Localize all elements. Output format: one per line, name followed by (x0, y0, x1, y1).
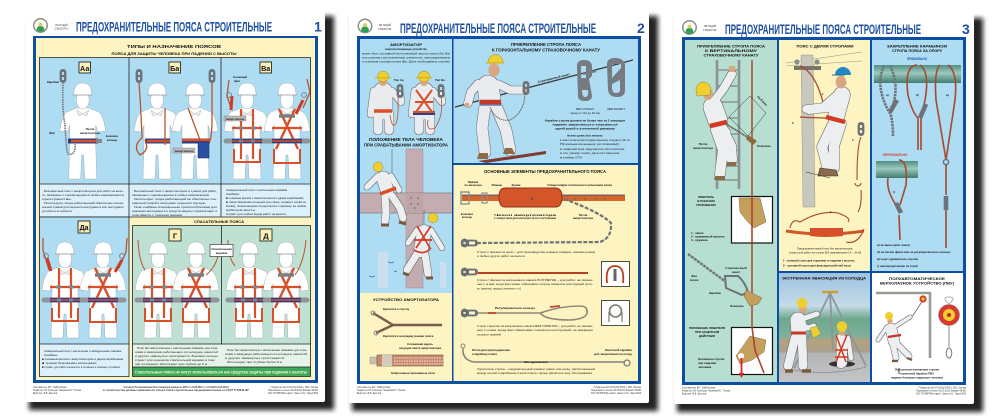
panel: autonomous device: При резком натяжении стропа (895, 368, 939, 372)
panel: rescue belts: Спасательные пояса не могут использоваться как средства защиты при падении с высоты (135, 370, 307, 374)
rope without braid sling (461, 300, 630, 336)
text block Va: ■ съемным фалом с амортизатором и двумя карабинами; (226, 196, 304, 200)
panel: Da: Универсальный пояс с наплечными и набедренными лямками. (44, 349, 122, 353)
belt type Aa (47, 62, 118, 179)
panel: absorber device: Капроновые прошивные нити (391, 371, 435, 375)
slogan (703, 25, 718, 32)
slogan: С ВЫСОТЫ ! (378, 28, 393, 31)
logo (682, 20, 697, 35)
rope in braid sling: Строп с фалом из капронового каната В ОПЛЕТКЕ – для работ, не связан- (477, 278, 593, 282)
panel: rescue belts: Пояс без амортизатора с наплечными лямками для стра- (227, 348, 307, 352)
panel: autonomous device (872, 273, 963, 382)
lanyard catcher detail (688, 254, 762, 308)
panel: attachment to horizontal rope: ● клеймо ОТК (560, 156, 582, 160)
rope in braid sling: ных с огнем, когда фал может обматывать острые элементы конструкций (угол- (477, 282, 593, 286)
panel: absorber device: Сложенная вдоль (407, 342, 433, 346)
belt: Ремень (492, 183, 503, 187)
panel: rescue belts: служит для переноски спасательной веревки в пояс (135, 358, 216, 362)
lineman (792, 66, 851, 178)
belt type Aa: Петля (86, 127, 95, 131)
rope in braid sling: ки, швеллер, твердого сечения и т.п.) (477, 286, 521, 290)
panel: carabine on support (872, 40, 963, 271)
panel: attachment to horizontal rope (454, 39, 638, 163)
text block Va: бокам), позволяющими осуществлять страховку, на любом (226, 204, 306, 208)
panel: attachment to horizontal rope: Страховочный канат (537, 72, 571, 84)
catcher working position: 3 - пружина (691, 238, 708, 242)
title: ПРЕДОХРАНИТЕЛЬНЫЕ ПОЯСА СТРОИТЕЛЬНЫЕ (400, 20, 596, 36)
workers Aa Ba: Тип Аа (394, 78, 404, 82)
rope without braid sling: Регулировочное кольцо (495, 306, 535, 310)
text block Ba: хранения инструмента и средств защиты. Сумка входит в (132, 209, 218, 213)
footer: в строительстве должны применяться только пояса строительные предохранительные по ГОСТ Р 50849-96* (103, 389, 249, 392)
panel: attachment to horizontal rope: одной рукой в утепленной рукавице (555, 126, 615, 130)
label correct: ПРАВИЛЬНО (907, 57, 928, 61)
footer: Составитель М.Г. Хайбуллина (357, 386, 391, 389)
footer: Подписано в печать 00.00.2011 Формат 60х90 (591, 389, 642, 392)
panel: rescue belts: Используют при глубине более 6 м (227, 360, 282, 364)
text block Va: Универсальный пояс с наплечными лямками. (226, 188, 288, 192)
footer: Редактор А.В. Кузнецов, Чеканова И.Г. Титова (682, 390, 731, 392)
panel: shock absorber: к съемным стропам пояса (Ва, Да) в необходимых случаях (362, 60, 451, 64)
panel: attachment to horizontal rope: ● товарный знак предприятия-изготовителя; (560, 147, 625, 151)
footer: © Издательство ООО«НЦ ЭНАС», 2011, Москва (593, 386, 642, 389)
damper sling (461, 344, 632, 375)
panel: top belts (40, 58, 310, 217)
legend (877, 243, 951, 268)
panel: rescue belts: Д (263, 232, 269, 240)
text block Aa: Используют, когда работающий обеспечен специ- (44, 201, 124, 205)
belt type Ba: Амортизатор (175, 149, 194, 153)
catcher working position: ЛОВИТЕЛЬ (698, 195, 714, 199)
panel: shock absorber: АМОРТИЗАТОР (390, 43, 423, 47)
frame (682, 37, 966, 385)
panel: carabine on support: ЗАКРЕПЛЕНИЕ КАРАБИНОМ (887, 44, 947, 48)
panel: shock absorber: энергопоглощающее устройство (385, 47, 427, 51)
rescuer (785, 298, 821, 371)
section heading: ТИПЫ И НАЗНАЧЕНИЕ ПОЯСОВ (127, 44, 221, 49)
belt type Aa: амортизатора (80, 131, 100, 135)
steel column and beam (360, 149, 452, 288)
damper sling: Винтовой карабин (605, 348, 632, 352)
slings correct: б) (916, 93, 919, 97)
panel: vertical rope: К ВЕРТИКАЛЬНОМУ (705, 49, 758, 53)
panel: shock absorber: или отдельно изготовленным элементом, присоединяемым (362, 56, 450, 60)
panel: rescue belts: ховки и эвакуации работающего из колодцев, емкостей (225, 352, 307, 356)
footer: Верстка: Ф.В. Щеглов (682, 392, 707, 396)
poster 1 (25, 10, 334, 410)
panel: rescue belts: веревка (216, 251, 228, 255)
main worker (465, 55, 529, 159)
belt type Ba: Ба (170, 64, 180, 73)
utility pole (786, 52, 862, 207)
rope (751, 60, 753, 370)
worker on ladder: амортизатора (693, 146, 713, 150)
big device (938, 297, 960, 358)
section heading: ПОЯСА ДЛЯ ЗАЩИТЫ ЧЕЛОВЕКА ПРИ ПАДЕНИИ С ВЫСОТЫ (112, 52, 236, 56)
panel: attachment to horizontal rope: Карабин стропа должен не более чем за 2 операции (545, 118, 625, 122)
footer: Составитель М.Г. Хайбуллина (33, 386, 67, 389)
belt: для статического испытания пояса (562, 183, 612, 187)
panel: vertical rope (685, 40, 777, 382)
panel: shock absorber (360, 39, 452, 293)
heading: body position: ПОЛОЖЕНИЕ ТЕЛА ЧЕЛОВЕКА (369, 137, 443, 142)
sling incorrect: г) (893, 190, 895, 194)
logo (33, 18, 48, 33)
catcher protective position: ДЕЙСТВИИ (699, 334, 715, 338)
small beam (876, 161, 918, 178)
belt type Va: Амортизатор (226, 117, 245, 121)
panel: attachment to horizontal rope: зазор от 114 до 20 мм (570, 111, 600, 115)
panel: well evacuation (779, 273, 870, 382)
section heading (112, 44, 236, 56)
legend: г) непосредственно за строп (877, 264, 918, 268)
panel: Da: ■ служит для работ на высоте в сложных и опасных условиях (42, 365, 121, 369)
belt drawing: 1 (830, 210, 832, 214)
belt drawing: Предохранительный пояс без амортизатора; (797, 246, 853, 250)
catcher working position (691, 195, 772, 243)
text block Va: Служит для любых видов работ на высоте (226, 212, 286, 216)
slogan (378, 24, 393, 31)
panel: attachment to horizontal rope: ● знак соответствия Государственному стандарту (ЗС по (560, 138, 630, 142)
belt type Va: фал (234, 79, 240, 83)
belt type Aa: Карабин (47, 80, 59, 84)
footer: ЗАО "ПОЛИГРАФ-сервис", Заказ № 51, Тираж 5000 (591, 392, 642, 395)
workers Aa Ba (371, 71, 445, 130)
panel: absorber device: несущая лента амортизатора (399, 346, 441, 350)
footer (357, 386, 642, 395)
belt: Отверстия (547, 183, 563, 187)
heading: body position (364, 137, 448, 148)
lanyard catcher detail: Страховочный (725, 266, 747, 270)
belt: Петля (579, 213, 588, 217)
sling incorrect (888, 160, 906, 240)
panel: two slings (779, 40, 870, 271)
poster 3 (674, 12, 983, 412)
belt type Ba (134, 62, 218, 179)
panel: attachment to horizontal rope: ● тип, размер пояса, дата изготовления; (560, 151, 620, 155)
footer: Верстка: Ф.В. Щеглов (33, 392, 58, 395)
text block Va: Снабжен: (226, 192, 240, 196)
chain sling: и любых других работ на высоте (477, 254, 525, 258)
belt type Aa: Боковое (106, 134, 118, 138)
rope without braid sling: острых граней (477, 332, 501, 336)
footer: ЗАО "ПОЛИГРАФ-сервис", Заказ № 51, Тираж 5000 (268, 392, 319, 395)
belt: по-мельком (464, 183, 482, 187)
text block Ba: Пояс снабжен специальным приспособлением для (134, 205, 218, 209)
belt drawing (783, 210, 864, 268)
buildings (369, 252, 446, 288)
catcher working position: ПОЛОЖЕНИИ (696, 203, 716, 207)
poster number: 2 (637, 20, 645, 36)
legend: б) за петлю фала или за регулировочное кольцо; (877, 250, 951, 254)
panel: attachment to horizontal rope: ЗЕВ ЗАКРЫТ (607, 107, 625, 111)
panel: autonomous device: надежно блокирует падающего человека (891, 376, 943, 380)
worker falling 1 (367, 149, 406, 225)
footer: Согласно Постановлению Ростехнадзора (приказ № 9079 от 31.08.2010 г. Lot СНиП 12-03-2001) (124, 386, 229, 389)
catcher protective position: при падении (698, 361, 716, 365)
footer (682, 386, 967, 396)
catcher protective position (689, 326, 772, 378)
panel: attachment to horizontal rope: надежно закрепляться и открываться (552, 122, 618, 126)
ladder (717, 60, 739, 189)
belt type Va: Съемный (233, 75, 247, 79)
footer: ЗАО "ПОЛИГРАФ-сервис", Заказ № 51, Тираж 5000 (916, 392, 967, 396)
slogan: НЕ ПАДАЙ (704, 25, 716, 28)
frame (357, 36, 641, 384)
panel: two slings: ПОЯС С ДВУМЯ СТРОПАМИ (796, 44, 854, 48)
footer: Верстка: Ф.В. Щеглов (357, 392, 382, 395)
panel: Da (40, 217, 129, 376)
legend: а) за звено цепи пояса; (877, 243, 910, 247)
manhole (829, 361, 855, 367)
footer: © Издательство ООО«НЦ ЭНАС», 2011, Москва (918, 386, 967, 390)
worker on ladder: Не более (756, 95, 769, 107)
belt: Кушак (512, 183, 521, 187)
belt: амортизатора (573, 216, 593, 220)
text block Aa: альной сумкой для переноса инструмента или инструмент (42, 205, 125, 209)
footer (33, 386, 319, 395)
poster number: 3 (962, 21, 970, 37)
panel: rescue belts: Г (173, 232, 178, 240)
text block Aa: пространстве. (42, 197, 72, 201)
panel: vertical rope: СТРАХОВОЧНОМУ КАНАТУ (704, 54, 759, 58)
worker falling 2 (403, 210, 442, 278)
panel: carabine on support: СТРОПА ПОЯСА ЗА ОПОРУ (892, 49, 943, 53)
damper sling: для закрепления на опору (594, 352, 632, 356)
damper sling: Фал удлинителя (524, 360, 548, 364)
belt: с отверстием для контроля за его состоянием (494, 216, 556, 220)
frame (33, 36, 318, 383)
chain sling: Строп с фалом из цепи – для производства огневых (сварка, газовая резка) (477, 250, 595, 254)
label incorrect: НЕПРАВИЛЬНО (883, 153, 908, 157)
text block Ba: пояс вместе с поясным ремнем (132, 213, 182, 217)
worker on ladder: Петля (699, 142, 708, 146)
rope without braid sling: Строп с фалом из капронового каната БЕЗ ОПЛЕТКИ – для работ, не связан- (477, 324, 593, 328)
worker with device (878, 312, 912, 361)
catcher working position: 2 - прижимный кулачок (691, 234, 725, 238)
panel: absorber device: УСТРОЙСТВО АМОРТИЗАТОРА (373, 298, 439, 302)
text block Va: рабочем месте. (226, 208, 256, 212)
belt (461, 180, 625, 220)
panel: rescue belts: при положении. Используют при глубине до 6 м (135, 362, 207, 366)
panel: attachment to horizontal rope: ПРИКРЕПЛЕНИЕ СТРОПА ПОЯСА (511, 42, 581, 47)
damper sling: к карабину пояса (472, 352, 497, 356)
text block Aa (42, 189, 125, 213)
title: ПРЕДОХРАНИТЕЛЬНЫЕ ПОЯСА СТРОИТЕЛЬНЫЕ (76, 18, 272, 34)
panel: rescue belts (132, 226, 310, 376)
footer: © Издательство ООО«НЦ ЭНАС», 2011, Москва (270, 386, 319, 389)
panel: belt elements (454, 165, 638, 381)
slings correct: в) (946, 93, 949, 97)
footer: Редактор А.В. Кузнецов, Чеканова И.Г. Титова (357, 389, 406, 392)
panel: autonomous device: ВЕРХОЛАЗНОЕ УСТРОЙСТВО (ПВУ) (880, 282, 955, 286)
belt: Боковое (461, 212, 473, 216)
beam (874, 65, 961, 83)
catcher protective position: человека (698, 365, 712, 369)
panel: absorber device: Крепится к несущему ремню пояса (383, 334, 434, 338)
lanyard catcher detail: пояса (690, 278, 699, 282)
panel: rescue belts: ховки и эвакуации работающего из колодцев, емкостей (135, 350, 218, 354)
text block Ba (132, 189, 218, 217)
spare sling: 1' (852, 138, 855, 142)
worker in well (835, 321, 851, 362)
text block Ba: связанных с перемещением в любых направлениях. (132, 193, 210, 197)
text block Ba: Безлямочный пояс с амортизатором и сумкой для работ, (134, 189, 217, 193)
text block Aa: для работы не требуется (42, 209, 72, 213)
slogan (54, 24, 69, 30)
rope without braid sling: ных с огнем, когда фал обматывает элементы конструкций, не имеющие (477, 328, 593, 332)
panel: shock absorber: может быть составной неотъемлемой частью пояса (Аа, Ва) (362, 52, 450, 56)
catcher protective position: ПРИ ЗАЩИТНОМ (695, 330, 720, 334)
belt: Пряжка (468, 180, 479, 184)
panel: attachment to horizontal rope: Промышленным условиям); (560, 142, 620, 146)
heading: body position: ПРИ СРАБАТЫВАНИИ АМОРТИЗАТОРА (364, 142, 448, 148)
rope in braid sling (461, 262, 630, 290)
damper sling: Удлинитель стропа – соединительный элемент (канат или цепь), расположенный (477, 367, 595, 371)
footer: Составитель М.Г. Хайбуллина (682, 386, 716, 390)
lanyard catcher detail: канат (732, 270, 740, 274)
panel: absorber device: Крепится к стропу (383, 307, 410, 311)
text block Va: ■ тремя боковыми кольцами (на спине, справа и слева по (226, 200, 306, 204)
spare sling (852, 122, 864, 212)
text block Ba: Используют, когда работающий не обеспечен спе- (134, 197, 217, 201)
slogan: НЕ ПАДАЙ (55, 24, 68, 27)
panel: Da: ■ съемным фалом с амортизатором и двумя карабинами; (42, 357, 124, 361)
slings correct: а) (886, 93, 889, 97)
lanyard catcher detail: Карабин (709, 291, 721, 295)
slogan: С ВЫСОТЫ ! (703, 29, 718, 32)
panel: rescue belts: и других замкнутых пространств. (225, 356, 285, 360)
belt type Aa: Аа (80, 64, 90, 73)
slings correct (880, 65, 956, 248)
panel: attachment to horizontal rope: ЗЕВ ОТКРЫТ (576, 107, 594, 111)
poster 2 (349, 10, 658, 411)
belt type Aa: кольцо (107, 138, 117, 142)
panel: vertical rope: ПРИКРЕПЛЕНИЕ СТРОПА ПОЯСА (697, 44, 766, 48)
logo (358, 18, 372, 34)
catcher working position: В РАБОЧЕМ (697, 199, 715, 203)
workers Aa Ba: Тип Ва (435, 78, 445, 82)
text block Ba: циальной сумкой и инструмент переносит вручную. (132, 201, 206, 205)
panel: rescue belts: и других замкнутых пространств. Боковое кольцо (135, 354, 218, 358)
panel: attachment to horizontal rope: К ГОРИЗОНТАЛЬНОМУ СТРАХОВОЧНОМУ КАНАТУ (492, 48, 600, 52)
panel: rescue belts: Пояс без амортизатора с наплечными лямками для стра- (137, 346, 218, 350)
belt type Va: Ва (261, 64, 271, 73)
lineman: 1 (822, 92, 824, 96)
belt drawing: 2 - основной строп для фиксации рабочей позы (783, 264, 852, 268)
belt: кольцо (462, 215, 472, 219)
panel: belt elements: ОСНОВНЫЕ ЭЛЕМЕНТЫ ПРЕДОХРАНИТЕЛЬНОГО ПОЯСА (484, 169, 606, 174)
belt type Va (224, 62, 310, 179)
rescue belts heading: СПАСАТЕЛЬНЫЕ ПОЯСА (194, 220, 244, 224)
belt: Чехол амортизатора (494, 213, 557, 217)
catcher protective position: Натяжение стропа (698, 357, 725, 361)
belt drawing: 1 - съемный строп для страховки от падения с высоты; (783, 258, 855, 262)
panel: rescue belts: Спасательная (211, 247, 232, 251)
belt drawing: служит для работ на опорах В/Л напряжением 0,4 – 10 кВ (789, 250, 861, 254)
hooks (577, 58, 625, 101)
slogan: НЕ ПАДАЙ (379, 24, 391, 27)
panel: absorber device (360, 293, 452, 381)
panel: Da: Снабжен: (44, 353, 58, 357)
footer: Подписано в печать 00.00.2011 Формат 60х90 (268, 389, 319, 392)
poster number: 1 (314, 18, 322, 34)
worker on ladder (693, 66, 771, 180)
text block Va (226, 188, 306, 216)
panel: attachment to horizontal rope: На поясе должны быть нанесены: (567, 134, 603, 138)
lanyard catcher detail: Фал (691, 274, 697, 278)
worker on ladder: Ловитель (757, 144, 771, 148)
catcher protective position: ПОЛОЖЕНИЕ ЛОВИТЕЛЯ (689, 326, 725, 330)
panel: Da: Да (79, 223, 90, 232)
footer: Подписано в печать 00.00.2011 Формат 60х90 (916, 390, 967, 392)
chain sling (461, 199, 611, 258)
panel: well evacuation: ЭКСТРЕННАЯ ЭВАКУАЦИЯ ИЗ КОЛОДЦА (782, 276, 866, 280)
legend: в) через удлинитель стропа; (877, 257, 918, 261)
panel: autonomous device: ПОЛУАВТОМАТИЧЕСКОЕ (889, 277, 946, 281)
damper sling: Петля для присоединения (472, 348, 510, 352)
footer: Редактор А.В. Кузнецов, Чеканова И.Г. Титова (33, 389, 82, 392)
lanyard catcher detail: Ловитель (730, 304, 744, 308)
damper sling: между петлей и карабином стропа пояса с целью увеличить зону обслуживания (477, 371, 592, 375)
belt type Aa: Фал (49, 131, 55, 135)
text block Aa: те, связанных с перемещением в любых направлениях в (42, 193, 124, 197)
text block Aa: Безлямочный пояс с амортизатором для работ на высо- (44, 189, 124, 193)
panel: autonomous device: тормозной барабан ПВУ (900, 372, 934, 376)
slogan: С ВЫСОТЫ ! (54, 28, 69, 30)
panel: Da: ■ тремя боковыми кольцами; (42, 361, 97, 365)
lineman: 2 (792, 121, 794, 125)
catcher working position: 1 - замок (691, 231, 704, 235)
tripod (794, 292, 866, 372)
